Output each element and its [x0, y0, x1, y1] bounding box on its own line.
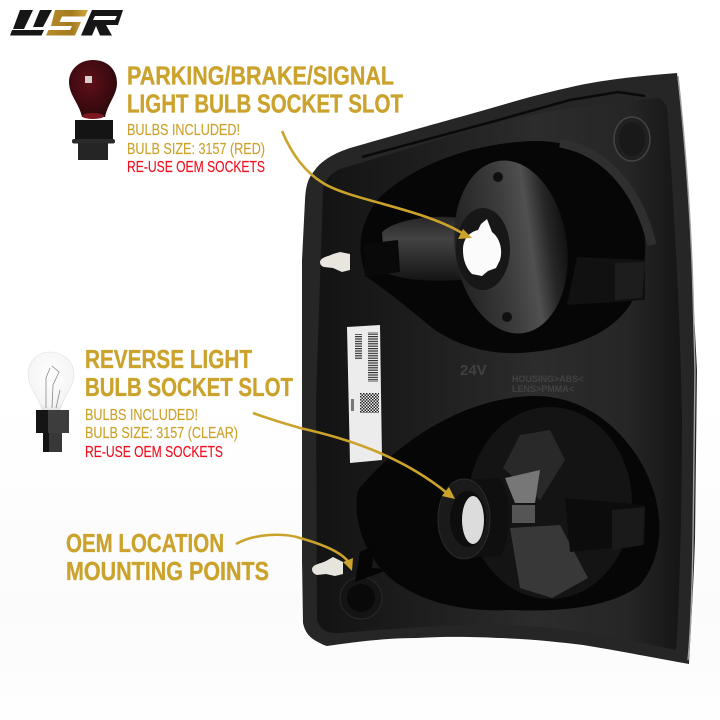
plug mount	[363, 240, 400, 277]
heading: parking/brake/signal	[127, 60, 403, 118]
arrow: to reverse socket	[253, 413, 455, 499]
mount tab: lower	[355, 545, 390, 582]
icon: red bulb	[69, 60, 117, 160]
heading: reverse light: BULB SOCKET SLOT	[85, 372, 293, 402]
socket disc: parking/brake/signal	[443, 153, 579, 341]
cylinder: upper socket barrel	[382, 217, 462, 281]
housing molded text: LENS>PMMA<	[512, 384, 574, 394]
grommet: upper right	[614, 117, 650, 161]
details: parking bulb: BULB SIZE: 3157 (RED)	[127, 141, 265, 158]
grommet: lower left	[340, 577, 382, 619]
socket: reverse light	[438, 479, 490, 559]
details: reverse bulb: BULB SIZE: 3157 (CLEAR)	[85, 425, 238, 442]
housing molded text: 24V	[460, 362, 487, 379]
socket collar	[456, 208, 510, 290]
bracket: upper	[567, 257, 645, 305]
logo: USR	[10, 10, 123, 36]
arrow: to mounting point	[236, 535, 353, 571]
heading: oem mounting: MOUNTING POINTS	[66, 556, 269, 586]
cavity rim highlight	[560, 143, 652, 245]
inner panel	[316, 98, 682, 650]
details: reverse bulb: RE-USE OEM SOCKETS	[85, 444, 223, 461]
mounting clip: upper	[320, 252, 350, 272]
lower reflector cavity	[356, 396, 659, 610]
heading: oem mounting: OEM LOCATION	[66, 528, 224, 558]
heading: reverse light	[85, 344, 293, 402]
upper reflector cavity	[361, 141, 645, 353]
barcodes	[351, 332, 379, 413]
details: reverse bulb	[85, 407, 238, 461]
top rim seam	[362, 92, 645, 157]
socket opening: white hole	[463, 219, 501, 276]
heading: parking/brake/signal: LIGHT BULB SOCKET SLOT	[127, 88, 403, 118]
icon: clear bulb	[28, 352, 74, 452]
mounting clip: lower	[312, 557, 343, 576]
housing outer shell	[302, 73, 697, 664]
details: reverse bulb: BULBS INCLUDED!	[85, 407, 198, 424]
heading: oem mounting	[66, 528, 269, 586]
label sticker	[347, 325, 382, 463]
details: parking bulb: RE-USE OEM SOCKETS	[127, 159, 265, 176]
heading: parking/brake/signal: PARKING/BRAKE/SIGNAL	[127, 60, 394, 90]
details: parking bulb: BULBS INCLUDED!	[127, 122, 240, 139]
tail light housing	[302, 73, 697, 664]
lens: lower	[468, 407, 632, 599]
bracket: lower	[565, 498, 645, 552]
cylinder: lower socket	[463, 478, 509, 558]
details: parking bulb	[127, 122, 265, 176]
heading: reverse light: REVERSE LIGHT	[85, 344, 252, 374]
housing molded text	[460, 362, 584, 394]
chrome right edge	[678, 76, 695, 660]
arrow: to parking socket	[282, 131, 472, 239]
housing molded text: HOUSING>ABS<	[512, 374, 584, 384]
